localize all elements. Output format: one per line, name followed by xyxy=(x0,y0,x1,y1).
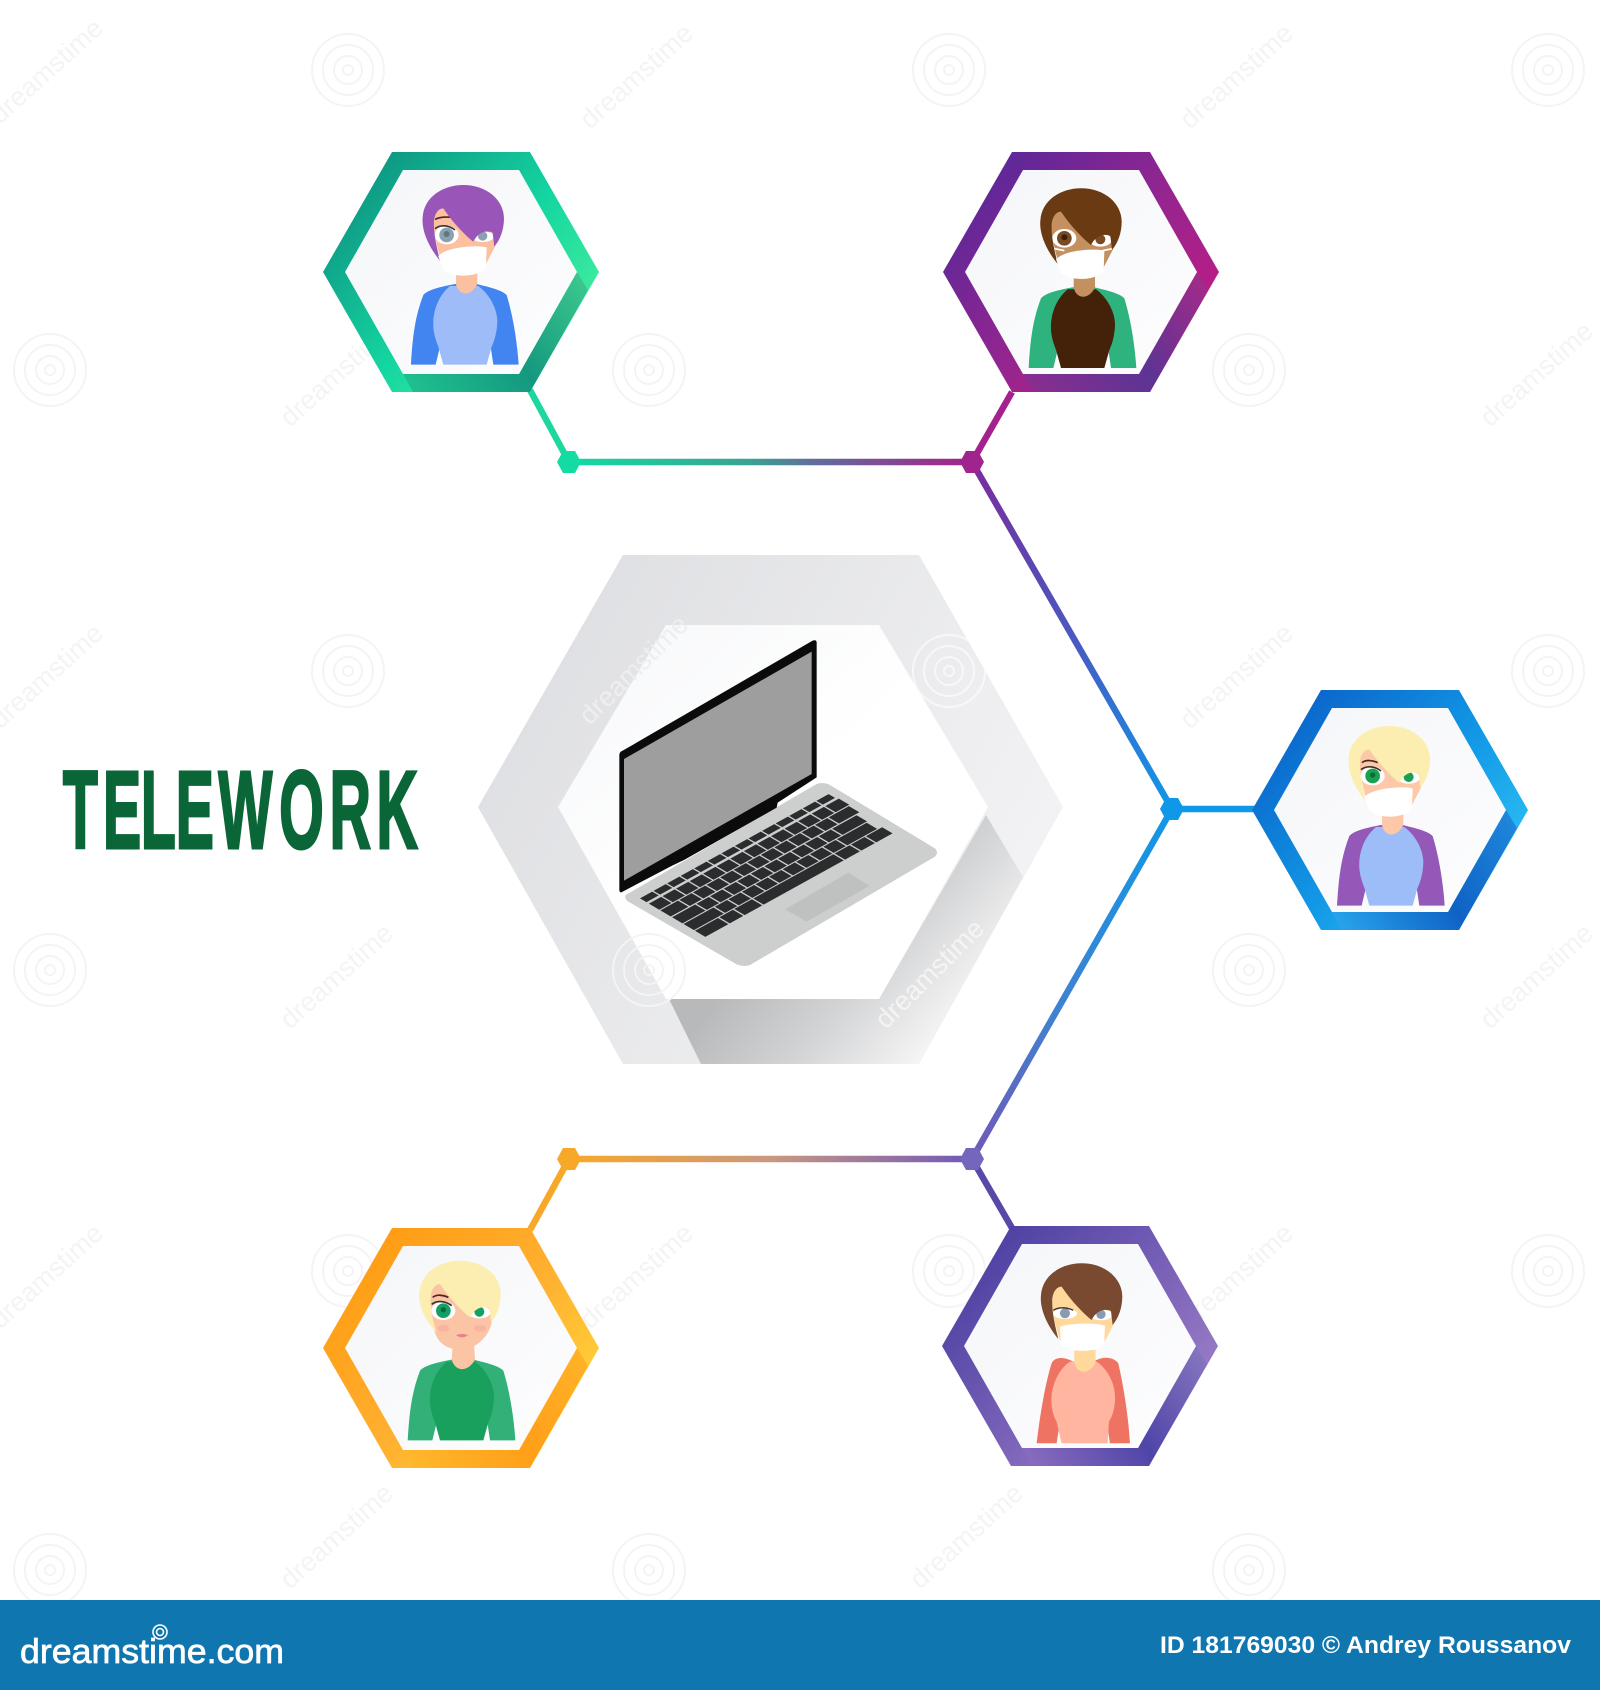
panel: person 4 orange hexagon xyxy=(323,1228,599,1468)
node: green xyxy=(557,451,581,473)
watermark on hexagon: dreamstime xyxy=(869,913,990,1034)
panel: person 1 green hexagon xyxy=(323,152,599,392)
avatar xyxy=(1037,1263,1130,1443)
title: TELEWORK xyxy=(63,749,418,872)
inner white hexagon xyxy=(558,625,988,999)
laptop base xyxy=(625,783,937,966)
watermark pattern: dreamstime xyxy=(574,1218,699,1334)
laptop screen bezel xyxy=(619,640,817,892)
avatar xyxy=(411,185,519,365)
watermark on hexagon xyxy=(573,609,990,1034)
watermark pattern: dreamstime xyxy=(1474,918,1599,1034)
watermark pattern: dreamstime xyxy=(274,316,399,432)
central hexagon with laptop xyxy=(478,555,1063,1064)
hexagon shadow xyxy=(669,815,1023,1064)
node: orange xyxy=(557,1148,581,1170)
panel: person 5 violet hexagon xyxy=(942,1226,1218,1466)
watermark pattern: dreamstime xyxy=(1174,1218,1299,1334)
line: blue to violet diagonal xyxy=(972,809,1172,1159)
avatar xyxy=(1029,188,1136,368)
line: violet hexagon drop xyxy=(972,1159,1012,1228)
hexagon frame xyxy=(943,152,1219,392)
line: purple hexagon drop xyxy=(972,392,1012,462)
footer bar xyxy=(0,1600,1600,1690)
laptop screen xyxy=(624,652,812,881)
line: green hexagon drop xyxy=(530,390,569,462)
line: orange to violet xyxy=(569,1156,972,1162)
icon: laptop xyxy=(619,640,937,966)
footer logo text: dreamstime.com xyxy=(20,1633,284,1671)
icon: logo spiral xyxy=(153,1625,167,1639)
keyboard xyxy=(643,795,890,934)
watermark pattern: dreamstime xyxy=(1174,618,1299,734)
node: violet xyxy=(960,1148,984,1170)
panel: person 3 blue hexagon xyxy=(1252,690,1528,930)
trackpad xyxy=(785,873,869,922)
hexagon frame xyxy=(323,1228,599,1468)
watermark pattern: dreamstime xyxy=(274,1478,399,1594)
hexagon frame xyxy=(323,152,599,392)
line: blue stub xyxy=(1172,806,1256,812)
watermark pattern: dreamstime xyxy=(904,1478,1029,1594)
watermark pattern: dreamstime xyxy=(274,918,399,1034)
node: purple xyxy=(960,451,984,473)
hexagon frame xyxy=(1252,690,1528,930)
avatar xyxy=(1337,726,1445,906)
hexagon frame xyxy=(942,1226,1218,1466)
watermark pattern: dreamstime xyxy=(574,18,699,134)
watermark on hexagon: dreamstime xyxy=(573,609,694,730)
watermark pattern: dreamstime xyxy=(1174,18,1299,134)
watermark pattern: dreamstime xyxy=(1474,316,1599,432)
panel: person 2 purple hexagon xyxy=(943,152,1219,392)
outer grey hexagon xyxy=(478,555,1063,1064)
footer credit: ID 181769030 © Andrey Roussanov xyxy=(1160,1632,1571,1659)
line: green to purple xyxy=(569,459,972,465)
line: purple to blue diagonal xyxy=(972,462,1172,809)
avatar xyxy=(408,1261,515,1440)
line: orange hexagon drop xyxy=(530,1159,569,1230)
connector lines xyxy=(530,390,1256,1230)
node: blue xyxy=(1160,798,1184,820)
